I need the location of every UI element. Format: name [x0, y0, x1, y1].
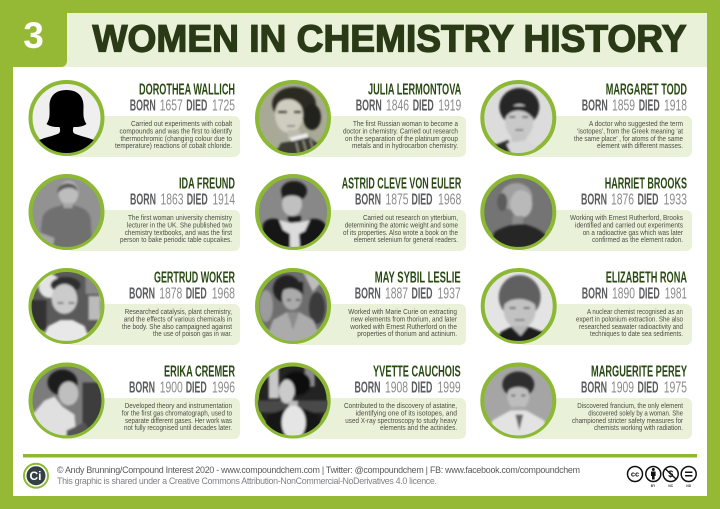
description: The first Russian woman to become a [353, 119, 459, 128]
birth and death years: DIED [638, 192, 658, 209]
birth and death years: DIED [186, 98, 207, 115]
birth and death years: DIED [186, 286, 207, 303]
description: techniques to date sea sediments. [590, 329, 683, 338]
birth and death years: 1999 [438, 380, 461, 397]
description [348, 307, 457, 338]
birth and death years: BORN [130, 192, 156, 209]
birth and death years: 1863 [160, 192, 184, 209]
description [344, 401, 457, 432]
description [120, 213, 233, 244]
description: the body. She also campaigned against [122, 322, 233, 331]
description: not fully recognised until decades later. [124, 423, 232, 432]
birth and death years [129, 380, 235, 397]
birth and death years [354, 380, 461, 397]
name: GERTRUD WOKER [154, 269, 235, 286]
birth and death years: BORN [356, 98, 382, 115]
birth and death years: DIED [412, 192, 432, 209]
text background [66, 304, 240, 345]
description: identifying one of its isotopes, and [356, 408, 457, 417]
birth and death years: 1981 [665, 286, 687, 303]
text background [66, 116, 240, 157]
birth and death years: 1968 [212, 286, 235, 303]
birth and death years: DIED [639, 286, 660, 303]
description: element selenium for general readers. [354, 235, 458, 244]
icon: Creative Commons licence badges: ND [686, 484, 692, 488]
birth and death years: BORN [129, 286, 155, 303]
birth and death years [582, 286, 687, 303]
birth and death years: 1878 [159, 286, 182, 303]
portrait: Elizabeth Rona [483, 270, 555, 342]
description: determining the atomic weight and some [345, 220, 458, 229]
birth and death years: 1996 [212, 380, 235, 397]
birth and death years: BORN [354, 380, 380, 397]
description [576, 307, 683, 338]
credits: This graphic is shared under a Creative Commons Attribution-NonCommercial-NoDerivatives 4.0 licence. [57, 476, 437, 486]
description: on the separation of the platinum group [345, 134, 458, 143]
icon: Creative Commons licence badges [628, 466, 696, 488]
birth and death years: 1918 [664, 98, 687, 115]
description [115, 119, 233, 150]
description: chemistry textbooks, and was the first [125, 228, 233, 237]
description: researched seawater radioactivity and [579, 322, 683, 331]
birth and death years: 1657 [160, 98, 183, 115]
name: IDA FREUND [179, 175, 235, 192]
description: Developed theory and instrumentation [125, 401, 232, 410]
description: person to bake periodic table cupcakes. [120, 235, 232, 244]
number tab [13, 13, 67, 67]
birth and death years: 1919 [438, 98, 461, 115]
description: metals and in hydrocarbon chemistry. [352, 141, 458, 150]
birth and death years: BORN [355, 286, 381, 303]
name: ERIKA CREMER [164, 364, 235, 380]
text background [66, 398, 240, 439]
text background [518, 304, 692, 345]
panel: Ida Freund [30, 175, 240, 251]
description: discovered solely by a woman. She [588, 408, 683, 417]
portrait: Yvette Cauchois [257, 364, 329, 440]
description: new elements from thorium, and later [351, 314, 457, 323]
birth and death years: DIED [639, 98, 660, 115]
portrait: Margaret Todd [482, 82, 554, 156]
birth and death years: 1937 [438, 286, 461, 303]
description: Carried out research on ytterbium, [363, 213, 458, 222]
text background [66, 210, 240, 251]
description: on a radioactive gas which was later [583, 228, 683, 237]
birth and death years: BORN [582, 98, 608, 115]
description: confirmed as the element radon. [592, 235, 683, 244]
birth and death years [129, 286, 235, 303]
panel: Yvette Cauchois [257, 364, 466, 440]
description: the same place’ , for atoms of the same [574, 134, 683, 143]
portrait: Ida Freund [30, 176, 102, 248]
description: separate different gases. Her work was [125, 416, 232, 425]
title band [13, 13, 707, 67]
icon: Creative Commons licence badges: NC [668, 484, 674, 488]
text background [293, 116, 466, 157]
panel: Gertrud Woker [30, 269, 240, 345]
birth and death years: 1975 [664, 380, 687, 397]
description: chemists working with radiation. [594, 423, 683, 432]
portrait: Julia Lermontova [257, 82, 329, 158]
birth and death years: DIED [186, 380, 207, 397]
description [122, 401, 232, 432]
description: thermochromic (changing colour due to [120, 134, 232, 143]
panel: Marguerite Perey [482, 364, 692, 439]
panel: Elizabeth Rona [483, 269, 692, 345]
birth and death years [355, 286, 461, 303]
description: championed stricter safety measures for [572, 416, 683, 425]
icon: Creative Commons licence badges: cc [631, 470, 639, 478]
description [122, 307, 233, 338]
panel: Dorothea Wallich [30, 81, 240, 158]
panel: Margaret Todd [482, 81, 692, 157]
panel: Astrid Cleve von Euler [257, 175, 466, 251]
birth and death years: BORN [581, 380, 607, 397]
icon: Compound Interest logo [24, 464, 48, 488]
icon: Compound Interest logo: Ci [30, 469, 42, 483]
birth and death years: DIED [412, 286, 432, 303]
birth and death years: 1914 [212, 192, 235, 209]
description [343, 213, 458, 244]
description: element with different masses. [597, 141, 683, 150]
birth and death years: BORN [582, 286, 608, 303]
description: properties of thorium and actinium. [357, 329, 457, 338]
description: A nuclear chemist recognised as an [587, 307, 683, 316]
name: JULIA LERMONTOVA [368, 81, 462, 98]
birth and death years: 1968 [438, 192, 461, 209]
text background [293, 210, 466, 251]
birth and death years: BORN [355, 192, 381, 209]
credits [57, 465, 580, 486]
description [574, 119, 684, 150]
description [343, 119, 459, 150]
portrait: Marguerite Perey [482, 364, 554, 436]
portrait: Astrid Cleve von Euler [257, 176, 329, 250]
text background [293, 398, 466, 439]
name: YVETTE CAUCHOIS [373, 364, 461, 380]
portrait: Erika Cremer [30, 364, 102, 436]
description: used X-ray spectroscopy to study heavy [345, 416, 457, 425]
birth and death years: 1875 [386, 192, 409, 209]
name: MAY SYBIL LESLIE [375, 269, 461, 286]
birth and death years: BORN [129, 380, 155, 397]
description: Researched catalysis, plant chemistry, [125, 307, 232, 316]
birth and death years [355, 192, 461, 209]
description: Contributed to the discovery of astatine, [344, 401, 457, 410]
birth and death years: DIED [638, 380, 658, 397]
icon: Creative Commons licence badges: BY [651, 484, 656, 488]
birth and death years: 1876 [611, 192, 634, 209]
credits: © Andy Brunning/Compound Interest 2020 - www.compoundchem.com | Twitter: @compoundchem | FB: www.facebook.com/compoundchem [57, 465, 580, 475]
birth and death years: 1900 [160, 380, 183, 397]
panel: May Sybil Leslie [257, 269, 466, 345]
description: elements and the actinides. [380, 423, 457, 432]
name: ASTRID CLEVE VON EULER [342, 175, 462, 192]
description: doctor in chemistry. Carried out research [343, 126, 458, 135]
birth and death years: 1887 [385, 286, 408, 303]
portrait: Dorothea Wallich silhouette [30, 82, 102, 158]
birth and death years: DIED [187, 192, 208, 209]
birth and death years: DIED [413, 98, 434, 115]
number tab: 3 [23, 15, 44, 56]
portrait: Gertrud Woker [30, 270, 102, 342]
birth and death years: 1908 [385, 380, 408, 397]
birth and death years: 1725 [212, 98, 235, 115]
description: temperature) reactions of cobalt chloride. [115, 141, 232, 150]
icon: Creative Commons licence badges: $ [668, 469, 673, 479]
text background [518, 210, 692, 251]
birth and death years [581, 192, 687, 209]
birth and death years: DIED [411, 380, 432, 397]
description: expert in polonium extraction. She also [576, 314, 683, 323]
description [572, 401, 684, 432]
description: Discovered francium, the only element [577, 401, 684, 410]
description: identified and carried out experiments [575, 220, 683, 229]
birth and death years: BORN [130, 98, 156, 115]
description: of its properties. Also wrote a book on the [343, 228, 458, 237]
description: the use of poison gas in war. [153, 329, 232, 338]
text background [293, 304, 466, 345]
panel: Julia Lermontova [257, 81, 466, 158]
birth and death years: 1859 [612, 98, 635, 115]
description: Working with Ernest Rutherford, Brooks [570, 213, 683, 222]
birth and death years: 1846 [386, 98, 409, 115]
description: worked with Ernest Rutherford on the [349, 322, 457, 331]
description: compounds and was the first to identify [120, 126, 232, 135]
description [570, 213, 683, 244]
description: The first woman university chemistry [128, 213, 232, 222]
panel: Erika Cremer [30, 364, 240, 439]
birth and death years: 1909 [611, 380, 634, 397]
description: Carried out experiments with cobalt [131, 119, 233, 128]
description: Worked with Marie Curie on extracting [348, 307, 457, 316]
panel: Harriet Brooks [482, 175, 692, 251]
birth and death years [356, 98, 461, 115]
birth and death years: 1933 [664, 192, 687, 209]
text background [518, 116, 692, 157]
description: A doctor who suggested the term [589, 119, 683, 128]
birth and death years [130, 98, 235, 115]
text background [518, 398, 692, 439]
description: ‘isotopes’, from the Greek meaning ‘at [577, 126, 684, 135]
portrait: May Sybil Leslie [257, 270, 329, 342]
name: DOROTHEA WALLICH [139, 81, 235, 98]
birth and death years [582, 98, 687, 115]
birth and death years [581, 380, 687, 397]
birth and death years: 1890 [612, 286, 635, 303]
title: WOMEN IN CHEMISTRY HISTORY [92, 18, 686, 60]
birth and death years [130, 192, 235, 209]
description: lecturer in the UK. She published two [127, 220, 232, 229]
description: for the first gas chromatograph, used to [122, 408, 232, 417]
birth and death years: BORN [581, 192, 607, 209]
portrait: Harriet Brooks [482, 176, 554, 248]
description: and the effects of various chemicals in [124, 314, 232, 323]
